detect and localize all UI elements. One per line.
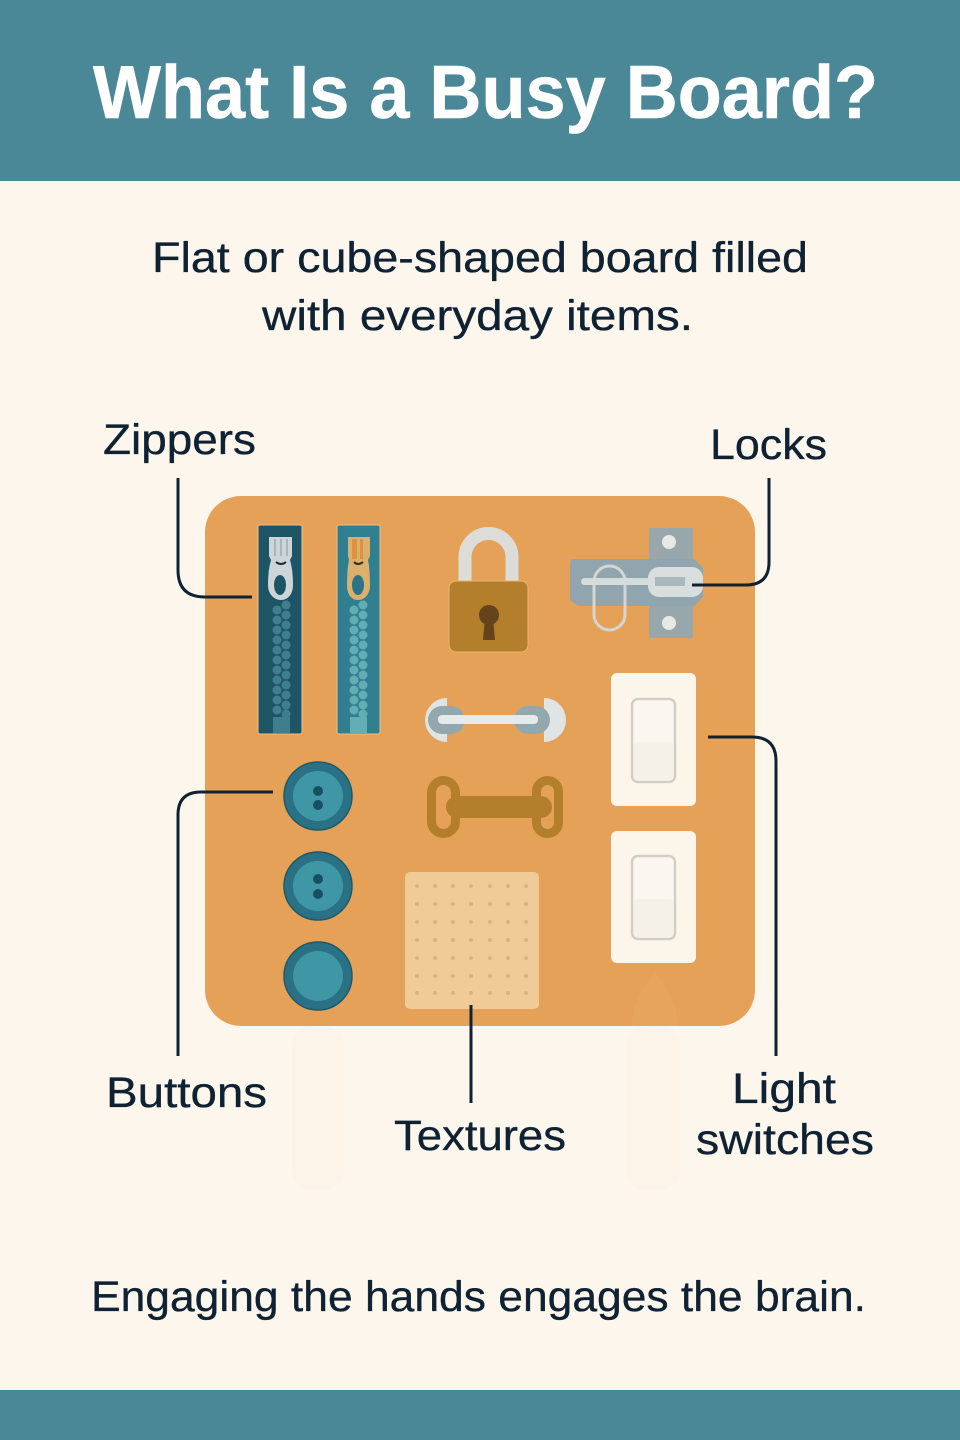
label: light switches bbox=[696, 1065, 874, 1164]
label: light switches: Light bbox=[732, 1065, 836, 1113]
label: zippers: Zippers bbox=[103, 416, 256, 464]
footer band bbox=[0, 1390, 960, 1440]
title: What Is a Busy Board? bbox=[93, 50, 878, 134]
board stand legs bbox=[292, 1026, 680, 1190]
label: textures: Textures bbox=[394, 1112, 566, 1160]
padlock bbox=[449, 534, 528, 652]
chain latch: brass bbox=[432, 780, 558, 834]
leader line: zippers bbox=[178, 478, 252, 597]
button 2 bbox=[284, 852, 352, 920]
label: locks: Locks bbox=[710, 421, 827, 469]
busy board bbox=[205, 496, 755, 1026]
texture pad bbox=[405, 872, 539, 1009]
subtitle: Flat or cube-shaped board filled bbox=[152, 234, 808, 282]
leader line: light switches bbox=[708, 737, 776, 1056]
tagline: Engaging the hands engages the brain. bbox=[91, 1273, 866, 1321]
light switch 2 bbox=[611, 831, 696, 963]
zipper: dark teal bbox=[258, 525, 302, 734]
button 1 bbox=[284, 762, 352, 830]
slide latch bbox=[570, 528, 703, 638]
subtitle bbox=[152, 234, 808, 340]
label: buttons: Buttons bbox=[106, 1069, 267, 1117]
subtitle: with everyday items. bbox=[261, 292, 693, 340]
leader line: textures bbox=[470, 1005, 472, 1103]
buttons bbox=[284, 762, 352, 1010]
light switch 1 bbox=[611, 673, 696, 806]
zipper: light teal bbox=[337, 525, 380, 734]
label: light switches: switches bbox=[696, 1116, 874, 1164]
button 3 bbox=[284, 942, 352, 1010]
chain latch: silver bbox=[425, 698, 566, 742]
leader line: locks bbox=[692, 478, 769, 585]
leader line: buttons bbox=[178, 792, 273, 1056]
header banner bbox=[0, 0, 960, 181]
